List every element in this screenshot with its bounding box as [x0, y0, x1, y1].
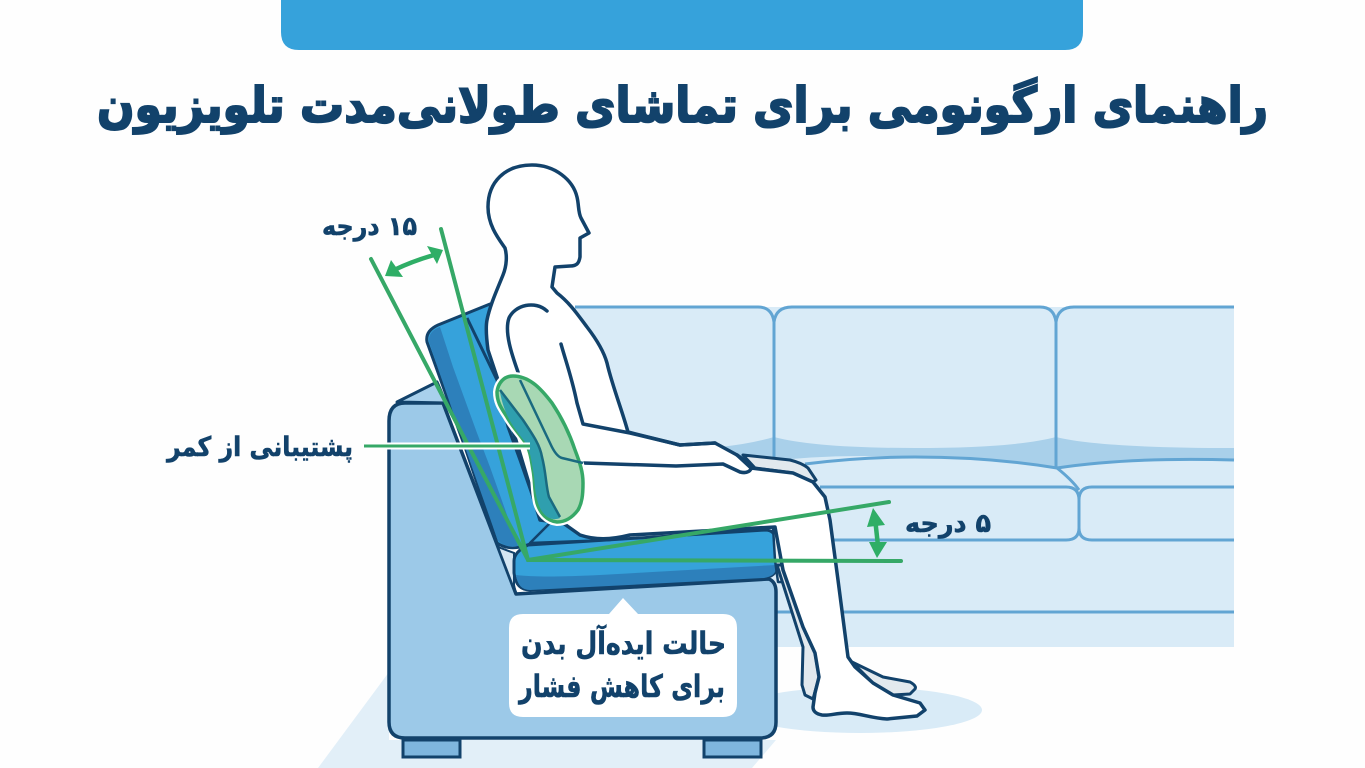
armchair body	[389, 403, 776, 738]
top banner	[281, 0, 1083, 50]
title: راهنمای ارگونومی برای تماشای طولانی‌مدت تلویزیون	[97, 77, 1268, 134]
wedge below lumbar	[530, 523, 610, 543]
lumbar spine lines	[500, 380, 583, 517]
hand	[584, 455, 751, 473]
gap between cushions	[498, 547, 516, 594]
label: 15 degrees: ۱۵ درجه	[322, 212, 417, 242]
lumbar teal spine area	[500, 392, 560, 519]
far thigh band	[743, 455, 816, 482]
shoulder arc	[507, 305, 547, 372]
floor	[318, 672, 776, 768]
label: 5 degrees: ۵ درجه	[905, 509, 991, 539]
chair side sliver	[773, 525, 786, 582]
floor shadow under feet	[738, 687, 982, 733]
chair legs	[403, 740, 761, 757]
body silhouette	[486, 165, 925, 719]
lumbar support	[497, 376, 583, 522]
sofa seat shadow	[720, 437, 1234, 468]
armchair	[389, 304, 776, 757]
background sofa	[575, 307, 1234, 647]
far foot	[852, 662, 915, 695]
backrest inner edge	[467, 318, 541, 520]
seated person	[486, 165, 925, 719]
angle lines	[371, 229, 901, 561]
arrow: 5 degrees	[867, 508, 887, 558]
arm top wedge	[397, 382, 446, 403]
callout line 2: برای کاهش فشار	[517, 669, 725, 705]
seat cushion shade	[516, 565, 776, 590]
backrest cushion	[427, 304, 560, 548]
far calf	[777, 565, 819, 699]
arrow: 15 degrees	[385, 246, 443, 277]
callout	[509, 598, 737, 717]
lumbar leader line	[364, 442, 530, 450]
backrest cushion shade	[429, 327, 518, 547]
seat cushion	[514, 530, 776, 590]
callout line 1: حالت ایده‌آل بدن	[521, 624, 726, 662]
inner arm	[561, 344, 715, 445]
label: lumbar support: پشتیبانی از کمر	[165, 432, 353, 463]
